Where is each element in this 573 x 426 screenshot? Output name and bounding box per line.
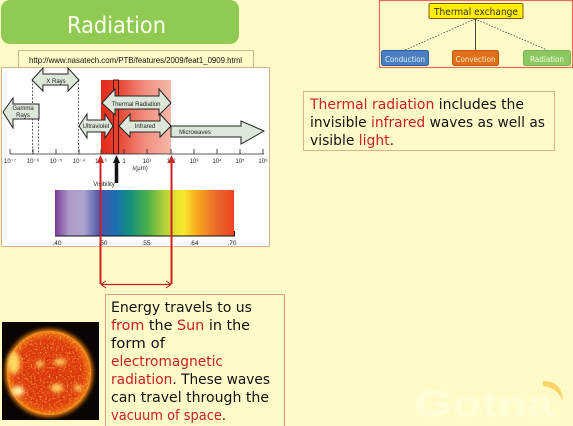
red bracket lines linking spectrum range: [97, 155, 175, 288]
source URL box: http://www.nasatech.com/PTB/features/2009/feat1_0909.html: [29, 55, 242, 65]
panel: thermal exchange concept map: [380, 0, 572, 68]
wavelength axis: 10²: [167, 159, 175, 165]
node: radiation: [524, 50, 570, 66]
wavelength axis: 10⁻⁵: [50, 158, 63, 165]
image: the Sun: [2, 322, 99, 420]
logo swoosh: [543, 381, 563, 401]
callout: energy from the Sun: vacuum of space.: [111, 408, 226, 424]
arrow: microwaves: [171, 121, 264, 144]
callout: thermal radiation definition: [304, 92, 554, 150]
wavelength axis: 10⁻⁴: [73, 158, 86, 165]
arrow: infrared: [119, 114, 171, 137]
node: conduction: [382, 50, 428, 66]
wavelength axis: 10³: [190, 159, 198, 165]
node: conduction: Conduction: [385, 55, 425, 64]
callout: thermal radiation definition: invisible infrared waves as well as: [310, 115, 545, 131]
title text: Radiation: [67, 13, 166, 39]
connector lines: [405, 19, 547, 50]
visible spectrum bar: .70: [227, 240, 237, 247]
node: convection: Convection: [456, 55, 496, 64]
callout: energy from the Sun: radiation. These waves: [111, 372, 270, 388]
arrow: gamma rays: Rays: [16, 113, 30, 119]
wavelength axis: λ(μm): [132, 166, 148, 172]
visible spectrum bar: .50: [98, 240, 108, 247]
visible spectrum bar: .64: [189, 240, 199, 247]
arrow: X rays: [32, 68, 79, 91]
callout: energy from the Sun: from the Sun in the: [111, 318, 250, 334]
arrow: thermal radiation: [102, 89, 171, 115]
wavelength axis: 10⁶: [258, 158, 268, 165]
watermark logo: Gotna: [414, 383, 555, 424]
arrow: ultraviolet: [79, 114, 113, 138]
arrow: microwaves: Microwaves: [179, 130, 211, 136]
arrow: gamma rays: [3, 98, 39, 128]
wavelength axis: 10¹: [143, 159, 151, 165]
arrow: infrared: Infrared: [135, 124, 155, 130]
thermal radiation shaded band: [101, 80, 171, 154]
wavelength axis: 1: [122, 159, 126, 165]
arrow: gamma rays: Gamma: [12, 106, 34, 112]
arrow: ultraviolet: Ultraviolet: [83, 124, 110, 130]
wavelength axis: 10⁵: [235, 158, 245, 165]
visible band outline: [114, 80, 118, 154]
wavelength axis: [4, 149, 268, 172]
arrow: visible light pointer: [93, 155, 120, 188]
arrow: visible light pointer: Visibility: [93, 182, 115, 188]
solar flares: [8, 352, 82, 396]
wavelength axis: 10⁻¹: [95, 159, 107, 165]
panel: electromagnetic spectrum chart: [2, 68, 270, 247]
node: radiation: Radiation: [530, 55, 564, 64]
title banner: [1, 0, 239, 44]
node: convection: [452, 50, 498, 66]
dashed guide lines: [32, 80, 78, 154]
callout: energy from the Sun: [106, 294, 284, 426]
callout: thermal radiation definition: visible light.: [310, 133, 394, 149]
arrow: X rays: X Rays: [46, 79, 66, 85]
callout: energy from the Sun: form of: [111, 336, 166, 352]
wavelength axis: 10⁻⁶: [27, 158, 40, 165]
watermark logo: [414, 381, 563, 424]
wavelength axis: 10⁴: [212, 158, 222, 165]
node: thermal exchange: [429, 4, 523, 18]
visible spectrum bar: [52, 190, 237, 247]
callout: energy from the Sun: Energy travels to us: [111, 300, 252, 316]
visible spectrum bar: .40: [52, 240, 62, 247]
callout: thermal radiation definition: Thermal radiation includes the: [309, 97, 524, 113]
node: thermal exchange: Thermal exchange: [433, 7, 518, 18]
source URL box: [18, 50, 254, 68]
wavelength axis: 10⁻⁷: [4, 158, 16, 165]
arrow: thermal radiation: Thermal Radiation: [111, 102, 161, 108]
visible spectrum bar: .55: [141, 240, 151, 247]
callout: energy from the Sun: electromagnetic: [111, 354, 223, 370]
callout: energy from the Sun: can travel through the: [111, 390, 269, 406]
